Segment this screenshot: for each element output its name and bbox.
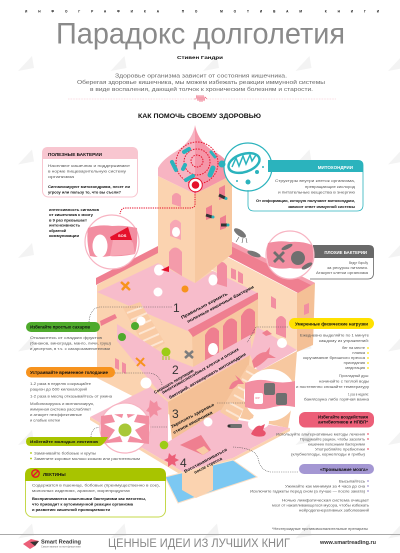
panel: bad bacteria: Атакуют клетки организма bbox=[316, 270, 369, 275]
circle: mitochondria bbox=[218, 143, 272, 191]
text: brain wash: мозг от накапливающегося мусора, чтобы избежать bbox=[272, 502, 369, 508]
grey blob on roof bbox=[247, 249, 261, 259]
panel: useful bacteria bbox=[42, 147, 138, 197]
footnote: *Нестероидные противовоспалительные препараты bbox=[272, 526, 368, 531]
text: exercise: и постепенно снижайте температуру bbox=[296, 384, 369, 389]
panel: bad bacteria: Ведут борьбу bbox=[349, 260, 368, 265]
dome signal rings bbox=[176, 142, 218, 184]
text: fasting: Мобилизируясь и мигнализируя, bbox=[30, 401, 94, 406]
pill: brain wash: «Промывание мозга» bbox=[320, 467, 369, 472]
step 2: Сокращать популяцию bbox=[153, 368, 195, 395]
text: exercise bbox=[296, 332, 370, 402]
panel: mitochondria: и питательные вещества в энергию bbox=[278, 190, 355, 195]
text: fasting bbox=[30, 381, 113, 422]
panel: lectins: что приводит к аутоиммунной реакции организма bbox=[32, 502, 134, 506]
text: fasting: и атакует неэффективные bbox=[30, 412, 82, 417]
step 2: пенетизмоспособных клеток и плохих bbox=[161, 346, 240, 395]
step 3: Укреплять здоровье bbox=[170, 402, 215, 429]
text: exercise: баня/сауна либо горячая ванна bbox=[304, 396, 370, 402]
right windows with cannons bbox=[206, 185, 230, 230]
text: fasting: 1-2 раза в неделю сокращайте bbox=[30, 381, 91, 386]
windows on lower left wall bbox=[115, 358, 126, 374]
panel: lectins: Содержатся в пшенице, бобовых (преимущественно в сое), bbox=[32, 482, 160, 488]
circle: bad bacteria bbox=[266, 231, 314, 279]
white bacterium in window bbox=[172, 227, 180, 237]
panel: useful bacteria: ПОЛЕЗНЫЕ БАКТЕРИИ bbox=[48, 152, 102, 157]
explosion cloud bbox=[248, 413, 269, 437]
wing windows and doors bbox=[217, 262, 309, 338]
panel: lectins: молочных изделиях, арахисе, морепродуктах bbox=[32, 488, 130, 493]
left windows bbox=[169, 193, 182, 276]
title: Парадокс долголетия bbox=[56, 18, 345, 50]
green bacterium bbox=[131, 322, 139, 330]
text: fasting: рацион до 600 килокалорий bbox=[30, 386, 87, 392]
callout: signal intensity: в 9 раз превышает bbox=[49, 217, 87, 222]
icon: prohibition sign bbox=[32, 470, 39, 477]
peach base of building bbox=[97, 250, 262, 415]
step 3: стенок кишечника bbox=[172, 409, 214, 435]
step labels bbox=[153, 284, 255, 475]
intro text: Оберегая здоровье кишечника, мы можем избежать реакции иммунной системы bbox=[77, 79, 325, 86]
tower target bbox=[189, 178, 202, 192]
wing block right bbox=[210, 248, 297, 350]
terrace 1 bbox=[97, 263, 258, 332]
author: Стивен Гандри bbox=[177, 55, 223, 61]
panel: lectins bbox=[25, 468, 166, 517]
pill: antibiotics bbox=[299, 412, 374, 428]
wing terrace bbox=[250, 327, 297, 372]
step 3: 3 bbox=[172, 407, 179, 421]
text: fasting: иммунная система расслабляет bbox=[30, 406, 91, 412]
text: exercise: приседания bbox=[344, 360, 365, 365]
text: exercise: скручивание брюшного пресса bbox=[303, 355, 366, 360]
dome bacteria bbox=[172, 149, 215, 180]
dark skylight on lower terrace bbox=[180, 435, 211, 455]
green half blob bbox=[118, 333, 126, 341]
stairs lower bbox=[220, 365, 262, 422]
step 4: после стресса bbox=[193, 456, 223, 475]
dome left bbox=[158, 125, 195, 194]
text: fasting: и слабые клетки bbox=[30, 418, 60, 422]
callout: signal intensity bbox=[49, 207, 100, 238]
footer: Smart Reading bbox=[41, 540, 81, 546]
pool bbox=[165, 460, 257, 503]
grey cannon bbox=[228, 424, 242, 428]
pill: avoid simple sugars bbox=[26, 322, 100, 332]
text: brain wash: Ночью лимфатическая система очищает bbox=[282, 498, 369, 502]
text: antibiotics: Употребляйте пребиотики bbox=[315, 446, 365, 452]
icon: logo bbox=[23, 539, 39, 549]
red burst bbox=[164, 453, 179, 467]
callout: signal intensity: интенсивность bbox=[49, 223, 81, 228]
footer: ЦЕННЫЕ ИДЕИ ИЗ ЛУЧШИХ КНИГ bbox=[108, 538, 291, 550]
clock bacterium bbox=[154, 288, 162, 296]
tower right wall bbox=[195, 175, 232, 283]
orange spot bbox=[182, 286, 188, 292]
fish upper bbox=[252, 347, 276, 368]
step 2: 2 bbox=[172, 363, 179, 377]
text: exercise: 1 раз в неделю: bbox=[348, 392, 369, 396]
white bacterium level 3 bbox=[204, 418, 212, 426]
step 1 bbox=[173, 284, 255, 324]
panel: useful bacteria: Населяют кишечник и поддерживают bbox=[48, 163, 130, 168]
text: exercise: Ежедневно выделяйте по 1 минуте bbox=[300, 332, 369, 338]
pill: avoid young lectins: Избегайте молодых лектинов bbox=[30, 439, 99, 444]
footer: www.smartreading.ru bbox=[319, 540, 376, 546]
footer bbox=[0, 534, 400, 550]
lower terrace rim bbox=[90, 417, 233, 476]
grey bug on roof bbox=[233, 227, 247, 243]
white bacterium on stairs bbox=[136, 316, 146, 326]
pill: exercise: Умеренные физические нагрузки bbox=[295, 322, 368, 326]
pool column bbox=[182, 465, 213, 498]
fish lower bbox=[229, 375, 244, 389]
step 2: бактерий, активировать митохондрии bbox=[168, 351, 247, 400]
text: lectin tips: Замачивайте бобовые и крупы bbox=[34, 450, 96, 456]
text: exercise: каждому из упражнений: bbox=[319, 338, 369, 343]
panel: lectins: Воспринимаются кишечными бактериями как патогены, bbox=[32, 496, 146, 501]
level 3 front wall bbox=[168, 355, 250, 441]
white bacterium bbox=[208, 274, 218, 286]
text: antibiotics: (клубнеплоды, корнеплоды и грибы) bbox=[291, 452, 366, 456]
text: brain wash bbox=[250, 478, 369, 512]
panel: mitochondria: От информации, которую получают митохондрии, bbox=[256, 198, 355, 203]
roof of right wing bbox=[210, 236, 315, 293]
left roof strip bbox=[96, 246, 158, 285]
lower right wall bbox=[240, 351, 297, 428]
white bacterium level 2 bbox=[140, 378, 152, 388]
text: exercise: начинайте с теплой воды bbox=[319, 378, 369, 384]
illustration: building bbox=[90, 236, 315, 503]
panel: useful bacteria: организма bbox=[48, 174, 75, 179]
callout: signal intensity: интенсивность сигналов bbox=[49, 207, 100, 212]
white bacterium in arch bbox=[208, 343, 218, 355]
pink diamond bbox=[262, 330, 272, 336]
panel: useful bacteria: угрозу или пользу то, что вы съели? bbox=[48, 190, 122, 194]
pill: antibiotics: антибиотиков и НПВП* bbox=[318, 420, 368, 424]
lime bacterium bbox=[162, 348, 170, 360]
circle: graves bbox=[244, 369, 296, 421]
terrace 2 bbox=[117, 324, 252, 400]
pill: fasting: Устраивайте временное голодание bbox=[30, 370, 109, 375]
intro text: Здоровье организма зависит от состояния кишечника. bbox=[115, 74, 288, 80]
panel: useful bacteria: в норме пищеварительную систему bbox=[48, 168, 126, 174]
text: brain wash: Высыпайтесь bbox=[339, 478, 365, 484]
text: exercise: Прохладный душ: bbox=[339, 373, 369, 378]
white bacterium with megaphone bbox=[154, 264, 169, 276]
text: sugars: (бананов, винограда, манго, личи, груш) bbox=[30, 340, 112, 345]
lime bacterium level 4 bbox=[160, 441, 168, 449]
circle: gut to brain SOS: SOS bbox=[118, 233, 127, 238]
callout: signal intensity: коммуникации bbox=[49, 233, 80, 238]
orange cross 1 bbox=[121, 282, 130, 290]
text: exercise: медитация bbox=[345, 365, 365, 370]
circle: graves: RIP bbox=[256, 397, 260, 400]
circle: level 3 burst bbox=[100, 403, 150, 453]
panel: mitochondria: МИТОХОНДРИИ bbox=[318, 165, 353, 170]
step 4: Восстанавливаться bbox=[183, 447, 228, 474]
panel: bad bacteria: за ресурсы питания. bbox=[327, 265, 368, 270]
pill: antibiotics: Избегайте воздействия bbox=[318, 414, 369, 420]
intro text bbox=[77, 74, 325, 93]
text: lectin tips bbox=[30, 450, 140, 461]
lower terrace bbox=[90, 387, 290, 472]
pill: exercise bbox=[289, 318, 374, 329]
step 1: Правильно кормить bbox=[180, 291, 229, 320]
white bacterium on wing bbox=[277, 338, 287, 348]
text: antibiotics: Используйте альтернативные методы лечения bbox=[276, 432, 365, 436]
rose band bbox=[188, 290, 265, 337]
red dotted signal line bbox=[120, 192, 195, 214]
text: brain wash: нейродегенеративных заболеваний bbox=[299, 508, 369, 512]
panel: bad bacteria: ПЛОХИЕ БАКТЕРИИ bbox=[324, 250, 367, 255]
text: exercise: планка bbox=[352, 350, 366, 355]
step 2 bbox=[153, 346, 247, 400]
pill: avoid simple sugars: Избегайте простых сахаров bbox=[30, 325, 90, 330]
pill: avoid young lectins bbox=[26, 437, 108, 446]
panel: mitochondria: Структуры внутри клеток организма, bbox=[275, 178, 355, 183]
text: exercise: бег на месте bbox=[342, 345, 365, 350]
callout: signal intensity: от кишечника к мозгу bbox=[49, 212, 94, 217]
circle: gut to brain SOS bbox=[85, 215, 139, 269]
text: antibiotics bbox=[276, 432, 369, 456]
text: brain wash: Ужинайте как минимум за 4 часа до сна bbox=[285, 484, 366, 488]
panel: lectins: ЛЕКТИНЫ bbox=[43, 472, 66, 477]
small roof left of stairs bbox=[100, 314, 117, 326]
dark right wall bbox=[297, 283, 315, 352]
panel: useful bacteria: Сигнализируют митохондриям, несет ли bbox=[48, 184, 131, 189]
section heading: КАК ПОМОЧЬ СВОЕМУ ЗДОРОВЬЮ bbox=[138, 113, 261, 120]
pink burst bbox=[146, 400, 162, 418]
text: sugars: Откажитесь от сладких фруктов bbox=[30, 335, 102, 340]
panel: bad bacteria bbox=[310, 245, 374, 279]
arches bbox=[205, 308, 255, 361]
footer: Самое важное из нон-фикшн книг bbox=[41, 546, 81, 548]
panel: mitochondria: превращающие кислород bbox=[305, 184, 356, 189]
stairs upper bbox=[123, 302, 165, 353]
tower bbox=[120, 125, 232, 283]
text: sugars bbox=[30, 335, 112, 351]
dome right bbox=[195, 125, 232, 194]
grey cross bbox=[185, 351, 193, 358]
step 1: полезные кишечные бактерии bbox=[186, 284, 255, 324]
intro text: в виде воспаления, дающей толчок к хроническим болезням и старости. bbox=[90, 86, 314, 93]
text: brain wash: Исключите гаджеты перед сном (а лучше — после заката) bbox=[250, 488, 366, 494]
panel: mitochondria bbox=[248, 160, 363, 211]
panel: lectins: и развитию кишечной проницаемости bbox=[32, 507, 111, 512]
callout: signal intensity: обратной bbox=[49, 228, 67, 233]
small terrace icons bbox=[118, 264, 287, 467]
pill: fasting bbox=[26, 367, 115, 378]
step 1: 1 bbox=[173, 301, 180, 315]
text: antibiotics: кишечник полезными бактериями bbox=[308, 442, 365, 446]
header line: ИНФОГРАФИКА ПО МОТИВАМ КНИГИ bbox=[25, 10, 380, 14]
text: fasting: 1-2 раза в месяц отказывайтесь от ужина bbox=[30, 394, 113, 398]
orange cross 2 bbox=[136, 358, 145, 366]
panel: mitochondria: зависит ответ иммунной системы bbox=[288, 204, 356, 209]
text: antibiotics: Продумайте рацион, чтобы заселить bbox=[300, 436, 365, 442]
tower left wall bbox=[158, 176, 195, 283]
dotted connectors bbox=[89, 307, 298, 472]
wall with arches bbox=[192, 296, 264, 367]
text: sugars: и десертов, в т.ч. с сахарозаменителями bbox=[30, 346, 110, 351]
divider with pulse bbox=[68, 95, 336, 102]
pill: brain wash bbox=[299, 464, 374, 474]
step 3 bbox=[170, 402, 215, 435]
text: lectin tips: Замените коровье молоко козьим или растительным bbox=[34, 456, 140, 461]
step 4: 4 bbox=[180, 456, 187, 470]
